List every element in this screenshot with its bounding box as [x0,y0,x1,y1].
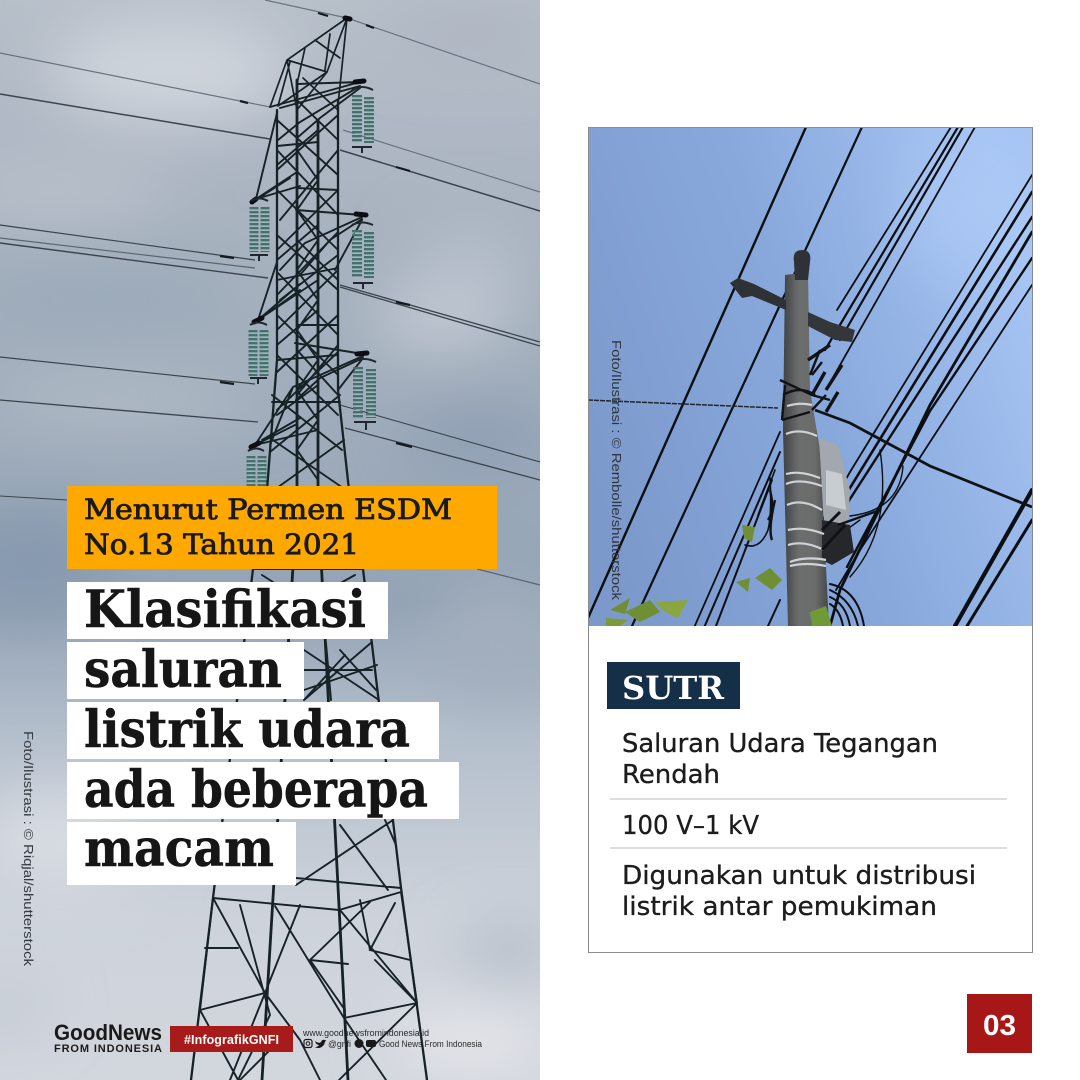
footer: hashtag badge: #InfografikGNFI [184,1033,279,1047]
footer: website and social handles: Good News From Indonesia [379,1039,482,1049]
lattice bracing [267,100,346,495]
sky with clouds [0,0,570,1080]
photo credit left: Foto/Ilustrasi : © Riqjal/shutterstock [21,731,35,967]
text: full name: Rendah [622,760,720,790]
lower lattice [253,569,379,700]
cable loops [849,449,904,578]
cap [794,250,810,280]
card border [588,128,1032,952]
silver bands [786,404,826,566]
panel: SUTR card [588,127,1040,952]
leaves [606,525,832,626]
pole [783,272,829,626]
line dampers [220,13,412,447]
power lines [0,0,540,585]
page number: 03 [983,1010,1016,1042]
background wires [588,127,1032,630]
title: listrik udara [84,700,410,760]
title: saluran [84,640,282,700]
title: Klasifikasi [84,580,366,640]
junction box [822,520,854,565]
cross arms [730,278,786,310]
text: usage: listrik antar pemukiman [622,892,937,922]
twisted service line [588,400,778,408]
text: usage: Digunakan untuk distribusi [622,861,976,891]
photo credit right: Foto/Ilustrasi : © Rembolle/shutterstock [609,340,623,601]
text: full name [622,729,938,790]
footer: GoodNews logo: GoodNews [54,1020,162,1045]
footer: website and social handles: @gnfi [328,1039,351,1049]
footer: hashtag badge [170,1026,293,1052]
text: usage [622,861,976,922]
subtitle banner [67,486,497,569]
title [67,580,459,885]
cross arms [255,82,363,445]
text: voltage range: 100 V–1 kV [622,811,759,841]
subtitle banner: Menurut Permen ESDM [84,493,452,526]
tower top frame [270,18,347,110]
title: ada beberapa [84,760,428,820]
footer: website and social handles: www.goodnewsfromindonesia.id [302,1028,429,1038]
footer: website and social handles [302,1028,482,1049]
label: SUTR [607,662,740,709]
footer: GoodNews logo: FROM INDONESIA [54,1043,162,1055]
text: full name: Saluran Udara Tegangan [622,729,938,759]
title: macam [84,819,274,879]
pole hardware and cable loops [768,345,880,550]
photo: utility pole [588,127,1040,630]
page number [967,994,1032,1053]
label: SUTR: SUTR [622,669,724,707]
main service cable [815,410,1032,507]
subtitle banner: No.13 Tahun 2021 [84,528,359,561]
transformer [819,438,850,525]
arm tips [251,18,367,447]
footer: GoodNews logo [54,1020,162,1055]
panel: tower photo [0,0,570,1080]
insulator strings [248,87,376,486]
transmission tower [191,18,427,1080]
main columns [191,100,427,1080]
